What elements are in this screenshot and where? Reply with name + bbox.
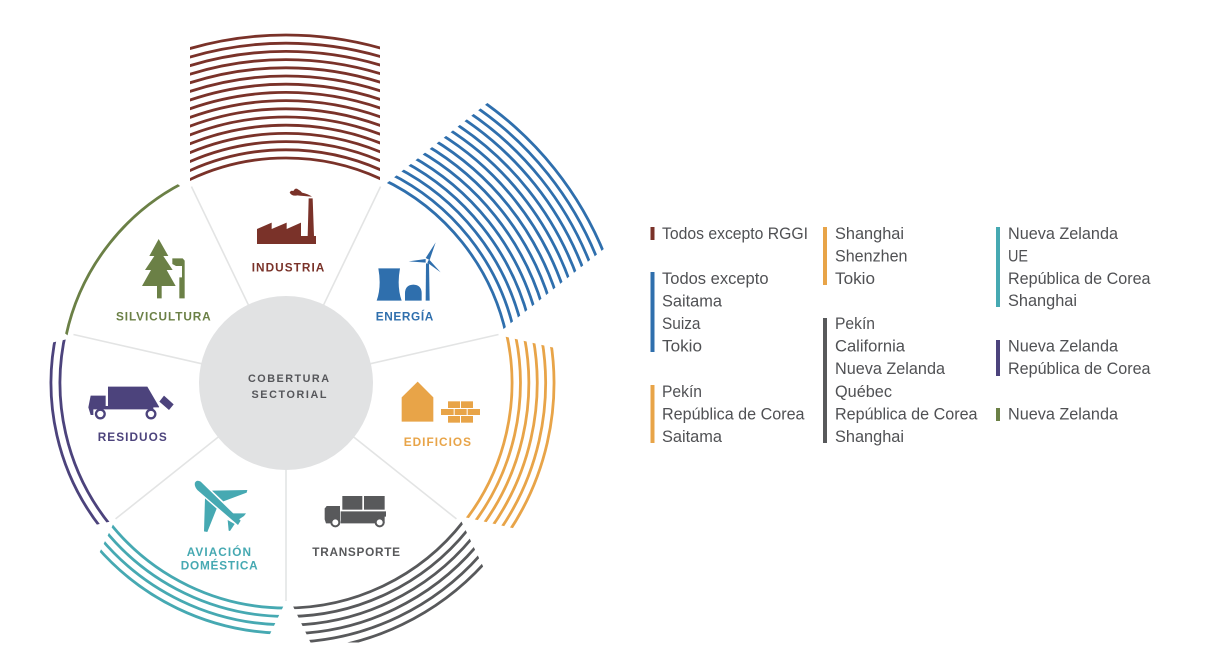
- center circle: cobertura sectorial: SECTORIAL: [252, 389, 327, 401]
- label: transporte: TRANSPORTE: [312, 545, 400, 559]
- legend: residuos: República de Corea: [1008, 360, 1151, 378]
- label: residuos: RESIDUOS: [98, 430, 167, 444]
- center circle: cobertura sectorial: COBERTURA: [248, 373, 329, 385]
- legend: silvicultura: Nueva Zelanda: [1008, 406, 1119, 424]
- label: aviacion domestica: AVIACIÓN: [187, 545, 251, 559]
- icon: tree and axe: [142, 239, 185, 298]
- center circle: cobertura sectorial: [199, 296, 373, 470]
- arcs: industria: [186, 35, 386, 181]
- arcs: edificios: [466, 336, 556, 528]
- legend: edificios, first group: República de Corea: [662, 406, 805, 424]
- legend: column 2: [823, 225, 978, 446]
- legend: edificios, first group: Saitama: [662, 428, 723, 446]
- legend: edificios, first group: [650, 383, 805, 446]
- legend: transporte: República de Corea: [835, 406, 978, 424]
- legend: transporte: California: [835, 338, 906, 356]
- icon: cooling tower and wind turbine: [377, 242, 441, 301]
- legend: transporte: Shanghai: [835, 428, 904, 446]
- arcs: residuos: [50, 340, 110, 525]
- legend: edificios, second group: Shenzhen: [835, 248, 908, 266]
- legend: transporte: [823, 315, 978, 446]
- label: edificios: EDIFICIOS: [404, 435, 471, 449]
- icon: house and bricks: [402, 382, 480, 423]
- legend: aviacion domestica: Shanghai: [1008, 292, 1077, 310]
- legend: residuos: [996, 338, 1151, 378]
- legend: edificios, second group: Tokio: [835, 270, 875, 288]
- legend: industria: Todos excepto RGGI: [662, 225, 808, 243]
- label: aviacion domestica: DOMÉSTICA: [181, 558, 258, 572]
- legend: transporte: Québec: [835, 383, 892, 401]
- sector wheel: [73, 187, 499, 601]
- icon: cargo truck: [325, 496, 386, 526]
- arcs: silvicultura: [65, 184, 180, 336]
- legend: transporte: Nueva Zelanda: [835, 360, 946, 378]
- legend: column 1: [650, 225, 808, 446]
- legend: energia: Todos excepto: [662, 270, 768, 288]
- legend: edificios, first group: Pekín: [662, 383, 702, 401]
- legend: aviacion domestica: Nueva Zelanda: [1008, 225, 1119, 243]
- legend: energia: Saitama: [662, 292, 723, 310]
- label: aviacion domestica: [181, 545, 258, 572]
- legend: column 3: [996, 225, 1151, 424]
- legend: edificios, second group: Shanghai: [835, 225, 904, 243]
- legend: energia: Tokio: [662, 338, 702, 356]
- icon: airplane: [195, 481, 247, 532]
- arcs: energia: [387, 103, 604, 329]
- label: energia: ENERGÍA: [376, 310, 434, 324]
- legend: aviacion domestica: [996, 225, 1151, 310]
- legend: transporte: Pekín: [835, 315, 875, 333]
- legend: aviacion domestica: UE: [1008, 248, 1028, 266]
- arcs: aviacion domestica: [100, 524, 284, 634]
- legend: energia: [650, 270, 768, 356]
- legend: residuos: Nueva Zelanda: [1008, 338, 1119, 356]
- label: silvicultura: SILVICULTURA: [116, 310, 211, 324]
- label: industria: INDUSTRIA: [252, 261, 325, 275]
- icon: factory: [257, 189, 316, 244]
- arcs: transporte: [293, 522, 484, 642]
- icon: garbage truck: [88, 387, 174, 418]
- legend: aviacion domestica: República de Corea: [1008, 270, 1151, 288]
- legend: edificios, second group: [823, 225, 908, 288]
- legend: energia: Suiza: [662, 315, 701, 333]
